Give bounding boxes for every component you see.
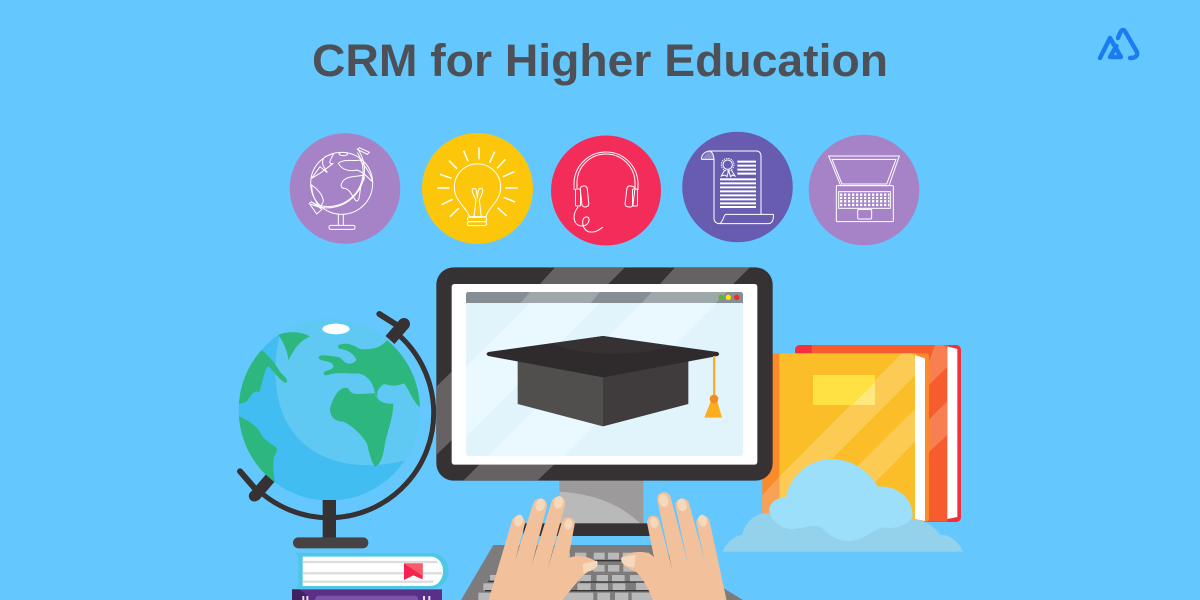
screen [466, 292, 743, 456]
icon: light bulb in yellow circle [422, 133, 533, 244]
bottom book [292, 589, 442, 600]
top book [295, 553, 449, 589]
cover label [813, 375, 875, 405]
front yellow book [762, 353, 929, 522]
browser title bar [466, 292, 743, 303]
keyboard [461, 545, 744, 600]
icon: laptop in purple circle [809, 135, 919, 245]
monitor [436, 267, 773, 481]
bookmark [404, 563, 423, 580]
graduation cap [486, 336, 722, 426]
monitor stand and keyboard [461, 477, 744, 600]
monitor frame [436, 267, 773, 481]
rear cloud [723, 513, 963, 552]
books right [723, 345, 963, 552]
cover shine stripes [779, 353, 915, 515]
globe stand arm [240, 314, 434, 518]
icon: certificate scroll in indigo circle [682, 132, 793, 242]
right hand [621, 492, 727, 600]
title: CRM for Higher Education [312, 35, 888, 86]
front cloud [769, 459, 913, 541]
logo [1100, 30, 1137, 58]
globe on stand [236, 313, 434, 548]
continents [236, 332, 421, 483]
icon: globe in purple circle [290, 133, 400, 244]
stacked books [292, 553, 449, 600]
left hand [488, 495, 598, 600]
monitor foot [523, 523, 650, 536]
icon: headset in red circle [551, 136, 661, 246]
rear red book [795, 345, 961, 522]
globe sphere [239, 319, 420, 501]
tassel [704, 356, 722, 418]
monitor neck [559, 477, 643, 525]
